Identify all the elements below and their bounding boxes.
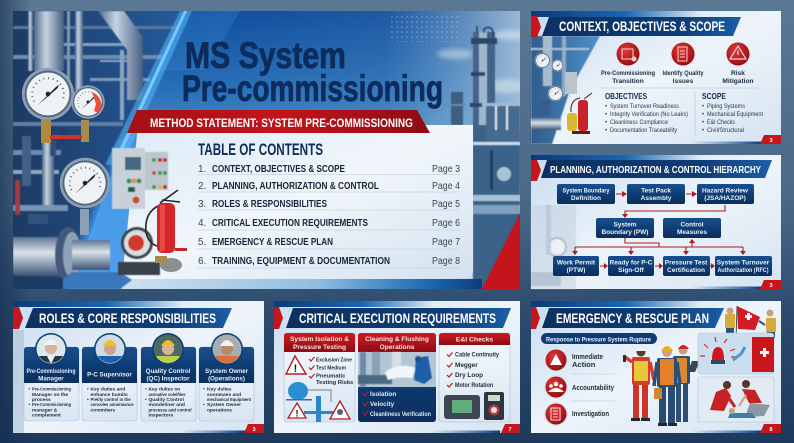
- table of contents: 6.: [198, 256, 206, 267]
- heading banner: [541, 160, 772, 178]
- table of contents: Page 5: [432, 199, 460, 210]
- table of contents: Page 6: [432, 218, 460, 229]
- panel: table of contents background: [122, 125, 473, 279]
- card: quality control inspector: •: [145, 388, 147, 393]
- card: quality control inspector: Key dulies on: [148, 387, 180, 393]
- card: pre-commissioning manager: Manager: [38, 376, 64, 382]
- page tab: 7: [508, 427, 512, 433]
- text block: scope: E&I Checks: [707, 120, 735, 126]
- text block: scope: Piping Systems: [707, 104, 745, 110]
- photo: pipework and pressure gauges: [13, 11, 188, 289]
- labels: three focus areas: Mitigation: [722, 78, 754, 85]
- table of contents: 3.: [198, 199, 206, 210]
- card: cleaning and flushing operations: [358, 333, 436, 422]
- box: hazard review: Hazard Review: [702, 188, 749, 194]
- icon: pre-commissioning transition: [615, 41, 641, 67]
- card: quality control inspector: assnative soleifties: [148, 392, 186, 398]
- worker: radio operator: [623, 347, 654, 421]
- card: quality control inspector: (QC) Inspector: [147, 376, 190, 382]
- card: pre-commissioning manager: Pre-Commissioning: [32, 387, 71, 393]
- icon: warning triangle: !: [294, 363, 297, 375]
- illustration: flag and responders: [725, 306, 776, 342]
- card: pre-commissioning manager: [24, 333, 79, 421]
- heading banner: [542, 17, 741, 36]
- control panel: [112, 148, 168, 209]
- text block: scope: Civil/Structural: [707, 128, 744, 134]
- text block: objectives: •: [605, 128, 607, 134]
- box: control measures: Measures: [677, 229, 707, 236]
- text block: scope: •: [702, 112, 704, 118]
- card: p-c supervisor: Key duties and: [90, 387, 125, 393]
- heading: table of contents: TABLE OF CONTENTS: [198, 140, 323, 159]
- box: test pack assembly: Test Pack: [641, 188, 671, 194]
- text block: objectives: Documentation Traceability: [610, 128, 677, 134]
- table of contents: Page 3: [432, 164, 460, 175]
- page tab: 3: [769, 283, 773, 289]
- box: ready for sign-off: Ready for P-C: [610, 260, 653, 266]
- card: pre-commissioning manager: •: [28, 388, 30, 393]
- box: control measures: Control: [680, 222, 704, 228]
- table of contents: PLANNING, AUTHORIZATION & CONTROL: [212, 181, 379, 192]
- page tab: [760, 135, 781, 144]
- checklist: Dry Loop: [455, 372, 483, 379]
- box: control measures: [663, 218, 721, 238]
- card: system isolation and pressure testing: System Isolation &: [290, 336, 349, 343]
- icon: risk mitigation: [725, 41, 751, 67]
- panel: cover slide: [13, 11, 528, 289]
- box: work permit: (PTW): [567, 267, 585, 274]
- page tab: [760, 424, 781, 433]
- worker: toolbox carrier: [654, 346, 680, 426]
- checklist: Cable Continuity: [455, 352, 499, 358]
- box: system boundary definition: System Boundary: [562, 188, 610, 194]
- heading banner: [25, 308, 232, 328]
- ribbon: method statement: [127, 110, 430, 133]
- card: pre-commissioning manager: Manager on the: [32, 392, 68, 398]
- page tab: [760, 280, 781, 289]
- text block: objectives: •: [605, 112, 607, 118]
- icon: identify quality issues: [670, 41, 696, 67]
- card: e and i checks: E&I Checks: [456, 336, 493, 344]
- text block: scope: Mechanical Equipment: [707, 112, 763, 118]
- box: system turnover authorization: [715, 256, 772, 276]
- heading banner: EMERGENCY & RESCUE PLAN: [556, 310, 709, 326]
- icon: warning triangle: !: [296, 408, 298, 418]
- box: pressure test certification: Pressure Test: [665, 260, 708, 266]
- gauge: red zone gauge: [71, 85, 105, 119]
- card: pre-commissioning manager: Pre-Commissioning: [32, 402, 71, 408]
- marker: red chevron: [13, 307, 23, 329]
- card: system owner: System Owner: [205, 368, 249, 375]
- heading banner: ROLES & CORE RESPONSIBILITIES: [39, 310, 216, 326]
- card: p-c supervisor: P-C Supervisor: [87, 372, 132, 378]
- card: p-c supervisor: commiters: [90, 407, 116, 413]
- card: system owner: •: [203, 388, 205, 393]
- card: system owner: Key dulies: [207, 387, 232, 393]
- checklist: Velocity: [370, 401, 395, 408]
- card: pre-commissioning manager: manager &: [32, 407, 58, 413]
- photo: pipes and gauges: [531, 36, 600, 144]
- icon: hazard triangle: [330, 401, 350, 419]
- card: pre-commissioning manager: complement: [32, 413, 61, 419]
- marker: red chevron: [274, 307, 283, 329]
- panel: emergency and rescue plan: [531, 301, 781, 433]
- text block: objectives: Cleanliness Compliance: [610, 120, 669, 126]
- title: MS System: [185, 35, 346, 76]
- table of contents: CRITICAL EXECUTION REQUIREMENTS: [212, 218, 368, 229]
- box: alarm and first aid: [698, 333, 774, 374]
- table of contents: 4.: [198, 218, 206, 229]
- checklist: Isolation: [370, 391, 396, 398]
- text block: objectives: •: [605, 104, 607, 110]
- gauge: lower gauge: [60, 158, 110, 208]
- card: p-c supervisor: enhance bumits: [90, 392, 128, 398]
- text block: objectives: OBJECTIVES: [605, 91, 647, 101]
- card: system isolation and pressure testing: [284, 333, 355, 422]
- panel: critical execution requirements: [274, 301, 520, 433]
- fire extinguishers: [567, 93, 592, 134]
- gauge fittings: [41, 119, 89, 235]
- card: cleaning and flushing operations: Cleaning & Flushing: [365, 336, 429, 343]
- checklist: Cleanliness Verification: [370, 411, 431, 418]
- table of contents: EMERGENCY & RESCUE PLAN: [212, 237, 333, 248]
- step: immediate action: Immediate: [572, 352, 603, 361]
- card: system owner: (Operations): [208, 376, 245, 382]
- table of contents: 5.: [198, 237, 206, 248]
- photo: pipe flushing: [358, 352, 436, 387]
- card: quality control inspector: processs and control: [148, 407, 192, 413]
- title: Pre-commissioning: [182, 68, 443, 109]
- label pill: response to pressure system rupture: [541, 333, 657, 344]
- heading banner: [286, 308, 511, 328]
- page tab: 8: [769, 427, 773, 433]
- box: ready for sign-off: [608, 256, 654, 276]
- labels: three focus areas: Identify Quality: [662, 70, 704, 77]
- flow chart: [553, 184, 772, 276]
- step: accountability: [544, 375, 615, 399]
- text block: scope: [702, 91, 763, 134]
- checklist: Testing Risks: [316, 380, 353, 386]
- avatar: inspector: [152, 333, 184, 366]
- card: p-c supervisor: •: [87, 398, 89, 403]
- table of contents: Page 8: [432, 256, 460, 267]
- title: [182, 35, 443, 109]
- table of contents: Page 7: [432, 237, 460, 248]
- card: pre-commissioning manager: process: [32, 397, 51, 403]
- box: system boundary definition: Definition: [571, 195, 601, 202]
- connectors and arrows: [572, 191, 746, 269]
- ribbon: method statement: METHOD STATEMENT: SYSTEM PRE-COMMISSIONING: [150, 116, 413, 130]
- photo: faded plant background: [531, 205, 576, 289]
- fire extinguisher: [146, 190, 187, 272]
- gauges: [535, 53, 577, 101]
- gauge: large pressure gauge: [22, 68, 74, 120]
- card: p-c supervisor: concoles annoimance: [90, 402, 134, 408]
- card: p-c supervisor: •: [87, 388, 89, 393]
- labels: three focus areas: Risk: [731, 70, 745, 77]
- avatar: supervisor: [94, 333, 126, 366]
- checklist: Megger: [455, 362, 478, 369]
- card: quality control inspector: Quality Control: [148, 397, 184, 403]
- heading banner: [542, 308, 724, 328]
- text block: scope: •: [702, 104, 704, 110]
- glow: diagonal light streak: [60, 11, 192, 289]
- box: system turnover authorization: System Turnover: [717, 260, 770, 266]
- table of contents: ROLES & RESPONSIBILITIES: [212, 199, 327, 210]
- box: system boundary: Boundary (PW): [602, 229, 648, 236]
- box: pressure test certification: Certification: [667, 267, 705, 274]
- refinery towers: [449, 26, 520, 289]
- checklist: Pneumatic: [316, 374, 346, 380]
- panel: planning authorization and control hierarchy: [531, 155, 781, 289]
- avatar: manager: [35, 333, 67, 366]
- box: system turnover authorization: Authorization (RFC): [718, 267, 768, 274]
- card: system owner: System Owner: [207, 402, 241, 408]
- step: investigation: [544, 402, 609, 426]
- box: pressure test certification: [663, 256, 710, 276]
- box: test pack assembly: [627, 184, 685, 204]
- box: work permit: [553, 256, 599, 276]
- box: hazard review: (JSA/HAZOP): [704, 195, 746, 202]
- equipment: flanged pipe: [13, 227, 132, 289]
- checklist: [447, 352, 499, 389]
- labels: three focus areas: [601, 70, 754, 85]
- table of contents: 1.: [198, 164, 206, 175]
- box: first aid treatment: [698, 377, 774, 422]
- card: pre-commissioning manager: Pre-Commissioning: [26, 368, 76, 375]
- checklist: Exclusion Zone: [316, 358, 353, 364]
- text block: objectives: [605, 91, 688, 134]
- card: system owner: •: [203, 403, 205, 408]
- box: system boundary: System: [613, 222, 637, 228]
- step: immediate action: Action: [572, 360, 596, 369]
- text block: scope: SCOPE: [702, 91, 726, 101]
- page tab: [501, 424, 520, 433]
- card: system isolation and pressure testing: Pressure Testing: [293, 344, 346, 351]
- table of contents: Page 4: [432, 181, 460, 192]
- table of contents: [197, 140, 460, 268]
- box: test pack assembly: Assembly: [641, 195, 672, 202]
- heading banner: CONTEXT, OBJECTIVES & SCOPE: [559, 18, 725, 34]
- page tab: 3: [769, 138, 773, 144]
- card: p-c supervisor: Pretily control in the: [90, 397, 131, 403]
- checklist: [363, 391, 431, 418]
- card: system owner: soonmaes and: [207, 392, 241, 398]
- step: immediate action: [544, 348, 603, 372]
- marker: red chevron: [531, 160, 541, 181]
- card: system owner: operations: [207, 407, 232, 413]
- marker: red chevron: [531, 307, 540, 329]
- icon: test instruments: [444, 392, 504, 420]
- box: system boundary: [596, 218, 654, 238]
- card: quality control inspector: inspectors: [148, 413, 174, 419]
- card: e and i checks: [439, 333, 510, 422]
- panel: roles and core responsibilities: [13, 301, 264, 433]
- table of contents: 2.: [198, 181, 206, 192]
- text block: objectives: Integrity Verification (No Leaks): [610, 112, 688, 118]
- worker: clipboard supervisor: [673, 345, 700, 422]
- box: hazard review: [697, 184, 754, 204]
- card: quality control inspector: Quality Control: [146, 368, 191, 375]
- card: p-c supervisor: [82, 333, 137, 421]
- table of contents: TRAINING, EQUIPMENT & DOCUMENTATION: [212, 256, 390, 267]
- step: accountability: Accountability: [572, 383, 615, 392]
- valve actuator: [118, 227, 160, 275]
- text block: scope: •: [702, 128, 704, 134]
- box: system boundary definition: [557, 184, 615, 204]
- checklist: Test Medium: [316, 366, 346, 372]
- text block: objectives: System Turnover Readiness: [610, 104, 679, 110]
- illustration: responders team: [623, 345, 700, 426]
- card: cleaning and flushing operations: Operations: [380, 344, 415, 351]
- table of contents: CONTEXT, OBJECTIVES & SCOPE: [212, 164, 345, 175]
- labels: three focus areas: Issues: [673, 78, 694, 85]
- card: system owner: [199, 333, 254, 421]
- card: quality control inspector: [141, 333, 196, 421]
- labels: three focus areas: Transition: [612, 78, 644, 85]
- box: ready for sign-off: Sign-Off: [618, 267, 645, 274]
- card: quality control inspector: •: [145, 398, 147, 403]
- avatar: owner: [211, 333, 243, 366]
- marker: red chevron: [531, 16, 541, 37]
- box: work permit: Work Permit: [557, 260, 596, 266]
- accent: red corner: [482, 213, 520, 289]
- labels: three focus areas: Pre-Commissioning: [601, 70, 655, 77]
- step: investigation: Investigation: [572, 409, 609, 418]
- checklist: [309, 357, 353, 386]
- page tab: 3: [252, 427, 256, 433]
- page tab: [244, 424, 264, 433]
- text block: scope: •: [702, 120, 704, 126]
- card: quality control inspector: mondeliner and: [148, 402, 185, 408]
- heading banner: CRITICAL EXECUTION REQUIREMENTS: [299, 310, 496, 326]
- label pill: response to pressure system rupture: Response to Pressure System Rupture: [546, 336, 651, 344]
- panel: context objectives and scope: [531, 11, 781, 144]
- text block: objectives: •: [605, 120, 607, 126]
- icon: pressure vessel and piping: [286, 382, 340, 422]
- card: pre-commissioning manager: •: [28, 403, 30, 408]
- checklist: Motor Rotation: [455, 382, 493, 389]
- card: system owner: mechanical Equipment: [207, 397, 251, 403]
